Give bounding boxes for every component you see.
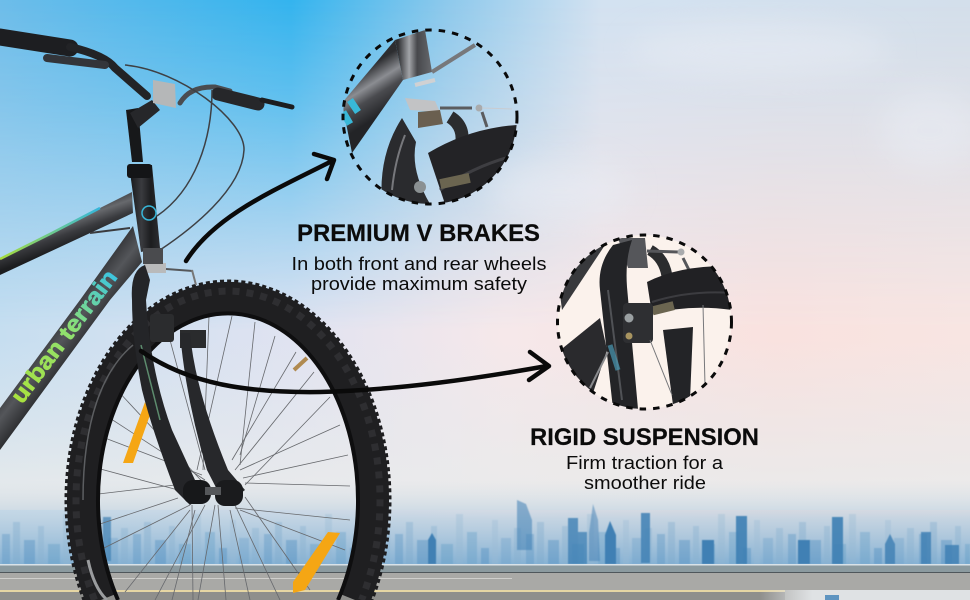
bicycle: head tube <box>126 100 160 252</box>
heading: rigid suspension: RIGID SUSPENSION <box>530 424 759 451</box>
bicycle: brake cables <box>125 65 244 250</box>
bicycle: seat stay brace <box>90 228 130 233</box>
bicycle: down tube <box>0 226 142 450</box>
bicycle: valve <box>294 358 307 370</box>
bicycle: fork <box>132 265 245 506</box>
bicycle: top tube <box>0 192 133 275</box>
description: suspension line 1: Firm traction for a <box>566 453 724 473</box>
arrow: to rigid suspension close-up <box>141 351 549 392</box>
background: city skyline <box>0 480 970 566</box>
bicycle: reflectors <box>123 402 340 593</box>
callout circle: premium V brakes close-up <box>342 30 517 204</box>
bicycle: frame label: urban terrain <box>5 265 122 408</box>
bicycle <box>0 37 388 600</box>
bicycle: bell mount <box>153 80 176 108</box>
arrow: to V brakes close-up <box>186 154 334 261</box>
bicycle: top tube stripe <box>0 208 100 259</box>
bicycle: tyre <box>68 283 388 600</box>
description: V brakes line 2: provide maximum safety <box>311 274 527 294</box>
description: suspension line 2: smoother ride <box>584 473 706 493</box>
text block: rigid suspension <box>530 424 759 493</box>
description: V brakes line 1: In both front and rear wheels <box>292 254 546 274</box>
bicycle: spokes <box>90 316 350 600</box>
heading: premium V brakes: PREMIUM V BRAKES <box>297 220 540 247</box>
bicycle: handlebar <box>0 37 292 107</box>
callout circle: rigid suspension close-up <box>557 235 732 409</box>
bicycle: brake assembly <box>143 248 206 348</box>
text block: premium V brakes <box>292 220 546 294</box>
road and barrier wall <box>0 564 970 600</box>
